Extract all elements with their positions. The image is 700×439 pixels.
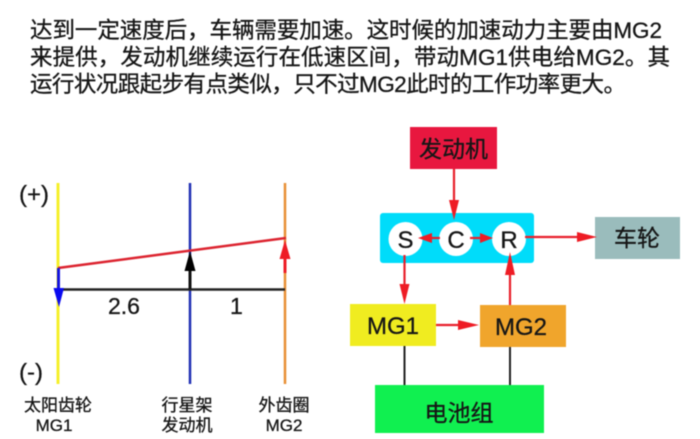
connector: MG1 to battery bbox=[404, 346, 406, 385]
box: engine bbox=[410, 127, 497, 169]
label: ring gear: MG2 bbox=[266, 416, 302, 435]
arrow: MG1 to MG2 bbox=[436, 320, 479, 330]
box: engine: 发动机 bbox=[419, 136, 488, 162]
diagram: power flow bbox=[350, 127, 680, 433]
arrow: S to MG1 bbox=[400, 255, 410, 304]
label: minus: (-) bbox=[19, 359, 43, 385]
arrow: C to R bbox=[470, 233, 493, 243]
arrow: MG1 down bbox=[54, 268, 64, 307]
label: sun gear: 太阳齿轮 bbox=[24, 396, 92, 415]
arrow: engine to C bbox=[449, 169, 459, 220]
label: ring gear bbox=[258, 396, 310, 435]
box: battery pack: 电池组 bbox=[424, 400, 494, 426]
arrow: MG2 up bbox=[280, 240, 290, 273]
node: S bbox=[388, 222, 422, 256]
arrow: engine up bbox=[184, 251, 196, 289]
chart: planetary gear lever diagram bbox=[19, 181, 310, 435]
node: C: C bbox=[447, 227, 465, 254]
arrow: R to wheels bbox=[525, 232, 597, 242]
box: planetary gear set bbox=[380, 213, 534, 263]
axis: planet carrier engine bbox=[189, 183, 191, 384]
label: planet carrier: 行星架 bbox=[162, 396, 212, 415]
label: planet carrier: 发动机 bbox=[162, 416, 212, 435]
arrow: MG2 to R bbox=[505, 252, 515, 305]
node: C bbox=[439, 222, 473, 256]
label: sun gear: MG1 bbox=[36, 416, 72, 435]
axis: sun gear MG1 bbox=[56, 183, 60, 384]
label: ring gear: 外齿圈 bbox=[258, 396, 310, 415]
node: S: S bbox=[397, 227, 414, 254]
box: battery pack bbox=[375, 385, 544, 433]
text block: description: 来提供，发动机继续运行在低速区间，带动MG1供电给MG2。其 bbox=[30, 45, 670, 70]
box: MG2 bbox=[480, 305, 566, 347]
arrow: C to S bbox=[418, 233, 440, 243]
box: wheels bbox=[595, 217, 680, 259]
node: R bbox=[492, 222, 526, 256]
speed line bbox=[58, 238, 286, 268]
node: R: R bbox=[500, 227, 518, 254]
label: sun gear bbox=[24, 396, 92, 435]
connector: MG2 to battery bbox=[509, 347, 511, 385]
text block: description: 运行状况跟起步有点类似，只不过MG2此时的工作功率更大。 bbox=[30, 72, 626, 97]
box: MG2: MG2 bbox=[495, 314, 547, 341]
text block: description bbox=[30, 18, 670, 97]
box: wheels: 车轮 bbox=[614, 225, 660, 251]
baseline bbox=[58, 288, 285, 291]
label: ratio 2.6: 2.6 bbox=[108, 293, 140, 319]
axis: ring gear MG2 bbox=[284, 183, 286, 384]
box: MG1 bbox=[350, 304, 436, 346]
label: planet carrier bbox=[162, 396, 212, 435]
text block: description: 达到一定速度后，车辆需要加速。这时候的加速动力主要由MG2 bbox=[30, 18, 662, 43]
label: ratio 1: 1 bbox=[230, 293, 243, 319]
box: MG1: MG1 bbox=[367, 313, 419, 340]
label: plus: (+) bbox=[19, 181, 49, 207]
